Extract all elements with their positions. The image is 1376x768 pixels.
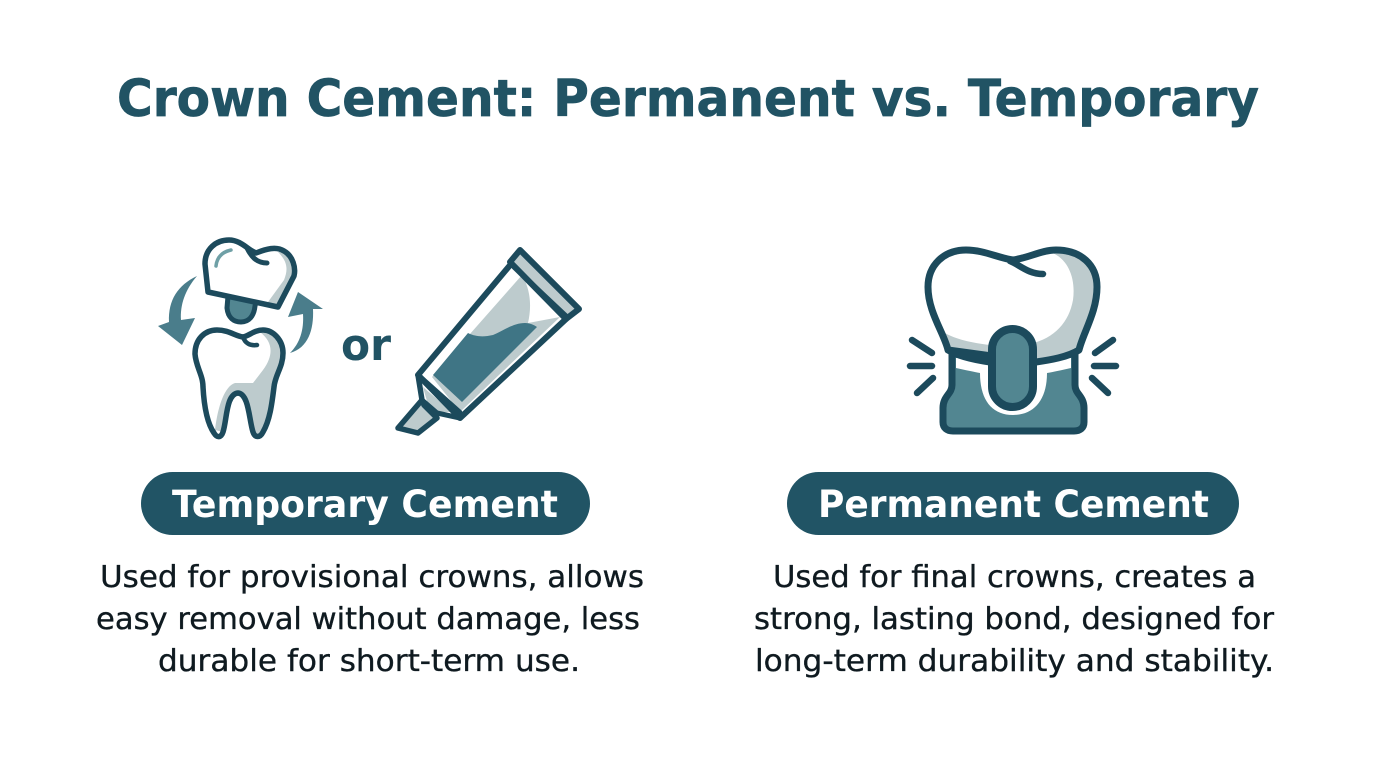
title: Crown Cement: Permanent vs. Temporary (117, 70, 1259, 129)
description: temporary cement: easy removal without damage, less (96, 602, 640, 637)
arrow: rotate down left (158, 276, 197, 345)
pill: permanent cement (787, 472, 1239, 535)
description: temporary cement: durable for short-term use. (158, 644, 580, 679)
panel: temporary cement (96, 240, 644, 679)
crown (928, 250, 1097, 362)
description: permanent cement: Used for final crowns, creates a (773, 560, 1256, 595)
description: permanent cement: long-term durability and stability. (755, 644, 1274, 679)
pill: permanent cement: Permanent Cement (818, 483, 1209, 526)
gum base (943, 352, 1084, 431)
description: permanent cement: strong, lasting bond, designed for (754, 602, 1274, 637)
label: or: or (341, 320, 391, 371)
description: temporary cement (96, 560, 644, 679)
crown cap (205, 240, 295, 307)
pill: temporary cement (141, 472, 590, 535)
arrow: rotate up right (288, 292, 323, 353)
post (992, 329, 1033, 407)
icon: crown lifting off tooth (158, 240, 323, 437)
tooth (195, 330, 283, 437)
post (227, 296, 256, 322)
pill: temporary cement: Temporary Cement (172, 483, 558, 526)
panel: permanent cement (754, 250, 1274, 679)
icon: cemented crown (910, 250, 1116, 431)
icon: cement tube (398, 250, 579, 433)
description: permanent cement (754, 560, 1274, 679)
bond marks (910, 340, 1116, 393)
description: temporary cement: Used for provisional crowns, allows (100, 560, 644, 595)
